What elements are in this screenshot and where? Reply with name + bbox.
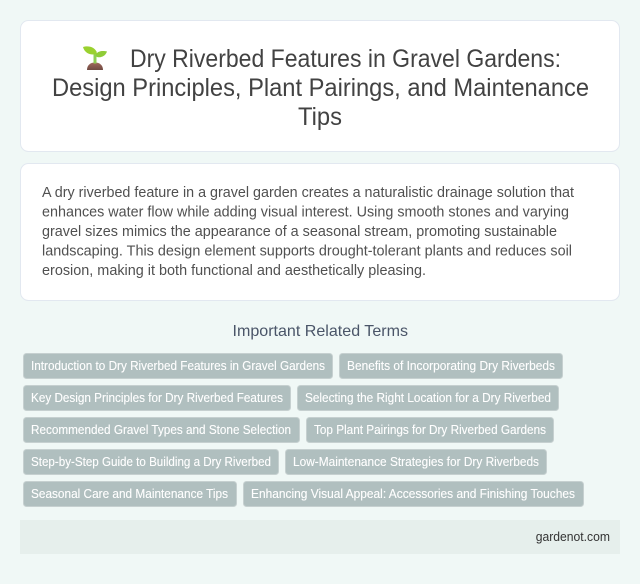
description text: A dry riverbed feature in a gravel garden creates a naturalistic drainage solution that xyxy=(42,184,575,201)
tag: selecting location: Selecting the Right Location for a Dry Riverbed xyxy=(305,391,551,405)
description text: enhances water flow while adding visual interest. Using smooth stones and varying xyxy=(42,204,569,220)
icon: seedling xyxy=(83,46,107,70)
tag: seasonal care xyxy=(24,482,236,506)
tag: seasonal care: Seasonal Care and Maintenance Tips xyxy=(31,487,228,501)
tag: introduction xyxy=(24,354,332,378)
footer xyxy=(20,520,620,554)
footer source text: gardenot.com xyxy=(536,530,610,544)
description text xyxy=(42,184,575,279)
tag: plant pairings: Top Plant Pairings for Dry Riverbed Gardens xyxy=(314,423,546,437)
tag: visual appeal xyxy=(244,482,584,506)
title: Dry Riverbed Features in Gravel Gardens: xyxy=(130,45,561,73)
tag: low-maintenance strategies: Low-Maintenance Strategies for Dry Riverbeds xyxy=(293,455,539,469)
description text: erosion, making it both functional and aesthetically pleasing. xyxy=(42,262,426,279)
tag: key design principles xyxy=(24,386,290,410)
title xyxy=(52,45,589,131)
title: Tips xyxy=(298,103,342,131)
tag: low-maintenance strategies xyxy=(286,450,546,474)
panel: related term tags xyxy=(24,354,584,506)
tag: visual appeal: Enhancing Visual Appeal: Accessories and Finishing Touches xyxy=(251,487,575,501)
tag: benefits: Benefits of Incorporating Dry Riverbeds xyxy=(347,359,555,373)
tag: step-by-step guide: Step-by-Step Guide to Building a Dry Riverbed xyxy=(31,455,271,469)
tag: step-by-step guide xyxy=(24,450,278,474)
tag: selecting location xyxy=(298,386,558,410)
tag: introduction: Introduction to Dry Riverbed Features in Gravel Gardens xyxy=(31,359,325,373)
tag: plant pairings xyxy=(306,418,554,442)
heading: important related terms: Important Related Terms xyxy=(232,323,408,340)
description text: landscaping. This design element supports drought-tolerant plants and reduces soil xyxy=(42,242,572,260)
description text: gravel sizes mimics the appearance of a seasonal stream, promoting sustainable xyxy=(42,223,557,240)
panel: description card xyxy=(20,164,620,300)
title: Design Principles, Plant Pairings, and Maintenance xyxy=(52,74,589,102)
tag: gravel types xyxy=(24,418,300,442)
tag: key design principles: Key Design Principles for Dry Riverbed Features xyxy=(31,391,283,405)
tag: gravel types: Recommended Gravel Types and Stone Selection xyxy=(31,423,291,437)
tag: benefits xyxy=(340,354,562,378)
panel: title card xyxy=(20,20,620,152)
